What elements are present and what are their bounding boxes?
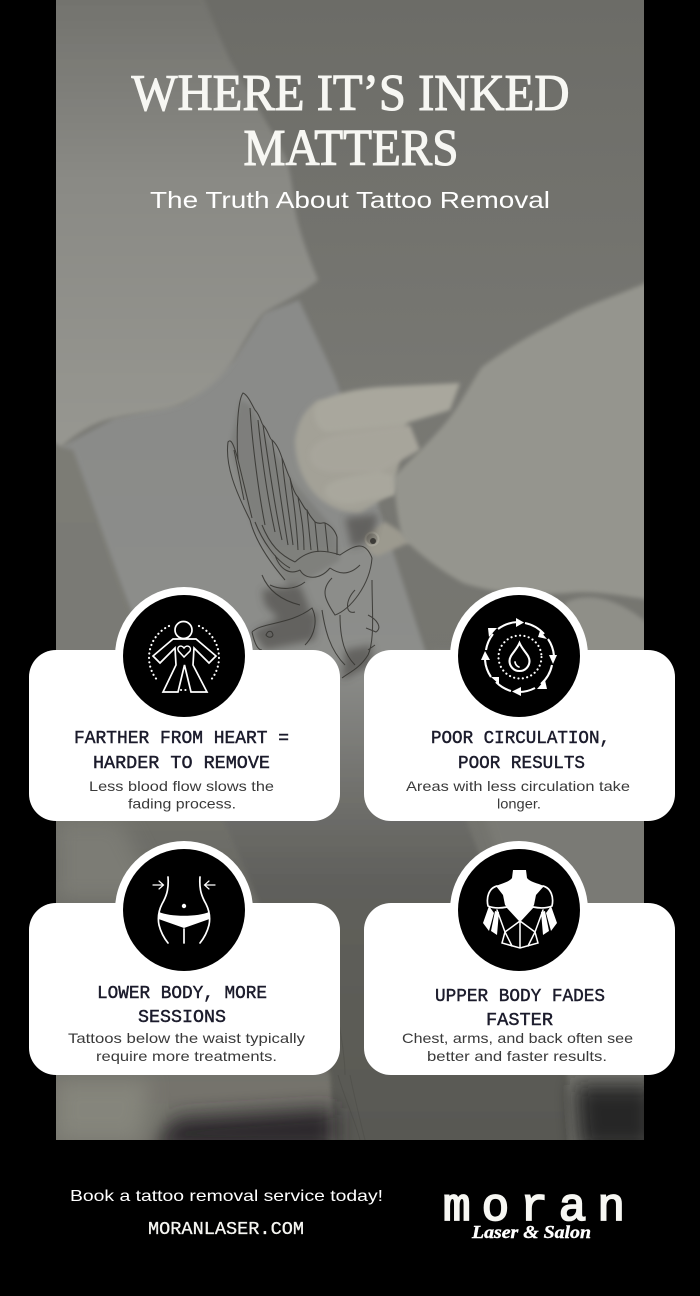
- heading: [97, 983, 267, 1028]
- body text: [68, 1030, 305, 1064]
- photo: fingers: [324, 381, 461, 498]
- photo: bird tattoo shading: [253, 514, 378, 680]
- title: MATTERS: [244, 120, 458, 177]
- body text: Areas with less circulation take: [406, 778, 630, 794]
- icon: circulation drop: [481, 618, 557, 696]
- heading: [435, 986, 605, 1031]
- heading: SESSIONS: [138, 1007, 226, 1028]
- card: upper body: [364, 841, 675, 1075]
- photo: arm: [61, 300, 570, 1150]
- body text: Less blood flow slows the: [89, 778, 274, 794]
- website: MORANLASER.COM: [148, 1220, 304, 1240]
- photo: lower right glove: [564, 596, 644, 650]
- photo: sleeve: [50, 0, 318, 447]
- card: farther from heart: [29, 587, 340, 821]
- card: poor circulation: [364, 587, 675, 821]
- heading: [431, 728, 610, 774]
- photo: wing shading: [230, 400, 340, 590]
- photo: arm hairs: [342, 1045, 345, 1064]
- heading: FASTER: [486, 1010, 553, 1031]
- subtitle: The Truth About Tattoo Removal: [150, 187, 550, 213]
- heading: LOWER BODY, MORE: [97, 983, 267, 1004]
- heading: UPPER BODY FADES: [435, 986, 605, 1007]
- heading: POOR RESULTS: [458, 753, 585, 774]
- icon: muscular back: [483, 870, 557, 948]
- body text: Chest, arms, and back often see: [402, 1030, 633, 1046]
- photo: gauze pad: [295, 400, 410, 513]
- photo: tube curl: [366, 532, 378, 546]
- background photo: arm with bird tattoo and gloved hand: [50, 0, 655, 1150]
- body text: [406, 778, 630, 812]
- body text: [89, 778, 274, 812]
- heading: FARTHER FROM HEART =: [74, 728, 289, 749]
- photo: panel top sleeve highlight: [56, 824, 138, 899]
- heading: [74, 728, 289, 774]
- body text: longer.: [497, 796, 541, 812]
- body text: [402, 1030, 633, 1064]
- title: WHERE IT’S INKED: [132, 65, 570, 122]
- body text: require more treatments.: [96, 1048, 277, 1064]
- photo: tube: [366, 522, 408, 556]
- body text: Tattoos below the waist typically: [68, 1030, 305, 1046]
- heading: HARDER TO REMOVE: [93, 753, 270, 774]
- heading: POOR CIRCULATION,: [431, 728, 610, 749]
- body text: better and faster results.: [427, 1048, 607, 1064]
- title: [132, 65, 570, 177]
- icon: body with heart: [149, 622, 219, 692]
- card: lower body: [29, 841, 340, 1075]
- photo: right lower backdrop: [588, 868, 642, 903]
- call to action: Book a tattoo removal service today!: [70, 1188, 383, 1205]
- logo: Laser & Salon: [471, 1222, 591, 1242]
- logo: moran: [443, 1182, 625, 1234]
- photo: bird tattoo lines: [227, 393, 379, 678]
- body text: fading process.: [128, 796, 236, 812]
- photo: doctor sleeve: [394, 281, 650, 600]
- photo: lower left shapes: [56, 1080, 655, 1150]
- icon: waist: [153, 877, 215, 943]
- photo: left lower backdrop: [230, 858, 242, 872]
